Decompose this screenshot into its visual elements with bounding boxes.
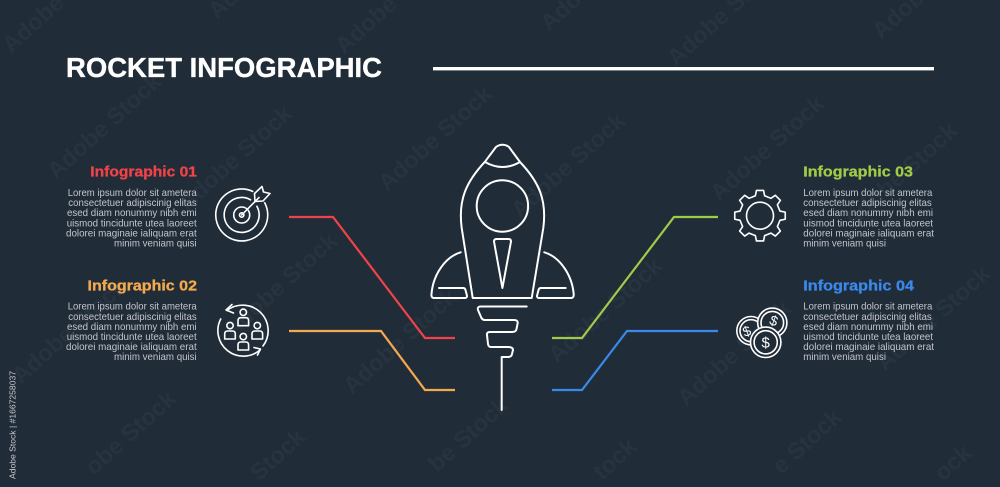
rocket window (477, 180, 528, 232)
connector line: orange (289, 331, 455, 390)
right wing (537, 252, 574, 298)
body text 04: consectetuer adipiscinig elitas (803, 312, 932, 323)
watermarks: Adobe Stock (672, 295, 797, 411)
body text 01: minim veniam quisi (114, 238, 197, 250)
body text 01: esed diam nonummy nibh emi (67, 208, 197, 219)
rocket exhaust trail (478, 306, 527, 410)
body text 04 (803, 302, 934, 363)
watermarks: Adobe Stock (373, 80, 498, 196)
body text 03 (803, 188, 934, 250)
body text 01: uismod tincidunte utea laoreet (67, 218, 197, 229)
connector line: blue (552, 331, 718, 390)
heading 03: Infographic 03 (803, 164, 913, 180)
heading 01: Infographic 01 (90, 164, 197, 180)
rocket nose (485, 162, 520, 167)
body text 04: Lorem ipsum dolor sit ametera (803, 302, 933, 313)
watermarks: Adobe Stock (218, 227, 343, 343)
body text 01: Lorem ipsum dolor sit ametera (68, 188, 197, 199)
body text 03: uismod tincidunte utea laoreet (803, 218, 933, 229)
icon: coins: $ (767, 312, 780, 329)
watermarks: be Stock (423, 391, 514, 477)
watermarks: Adobe Stock (173, 100, 298, 216)
panel: infographic 02 text (66, 278, 197, 363)
body text 01 (66, 188, 197, 250)
left wing (431, 252, 467, 298)
watermarks: e Stock (767, 403, 847, 479)
icon: coins: $ (740, 322, 753, 340)
panel: infographic 01 text (66, 164, 197, 250)
panel: infographic 03 text (803, 164, 934, 250)
watermarks: Adobe Stock (506, 107, 631, 223)
watermarks: Adobe Stock (7, 273, 132, 389)
watermarks: Adobe Stock (42, 68, 167, 184)
watermarks: Adobe Stock (871, 260, 996, 376)
body text 02: Lorem ipsum dolor sit ametera (68, 302, 197, 313)
watermarks: Adobe Stock (705, 90, 830, 206)
body text 02 (66, 302, 197, 363)
body text 03: consectetuer adipiscinig elitas (803, 198, 932, 209)
body text 02: uismod tincidunte utea laoreet (67, 332, 197, 343)
icon: gear (735, 190, 785, 241)
icon: coins: $ (762, 335, 770, 352)
watermarks: ock (929, 439, 977, 486)
stock id: Adobe Stock | #1667258037 (8, 371, 18, 479)
body text 03: Lorem ipsum dolor sit ametera (803, 188, 933, 199)
heading 02: Infographic 02 (88, 278, 197, 294)
watermarks: obe Stock (80, 385, 181, 480)
watermarks: Adobe Stock (543, 252, 668, 368)
body text 04: dolorei maginaie ialiquam erat (803, 342, 934, 353)
panel: infographic 04 text (803, 278, 934, 363)
icon: coins (737, 308, 787, 357)
body text 01: dolorei maginaie ialiquam erat (66, 228, 197, 239)
rocket (431, 145, 574, 410)
title: ROCKET INFOGRAPHIC (66, 52, 382, 83)
body text 01: consectetuer adipiscinig elitas (68, 198, 197, 209)
body text 02: esed diam nonummy nibh emi (67, 322, 197, 333)
body text 03: dolorei maginaie ialiquam erat (803, 228, 934, 239)
icon: team with cycle arrows (218, 304, 268, 356)
rocket centre fin (494, 239, 511, 288)
body text 02: consectetuer adipiscinig elitas (68, 312, 197, 323)
connector line: green (552, 217, 718, 338)
body text 04: esed diam nonummy nibh emi (803, 322, 933, 333)
watermarks: Stock (245, 423, 311, 486)
watermarks: tock (588, 432, 642, 485)
body text 02: dolorei maginaie ialiquam erat (66, 342, 197, 353)
body text 04: minim veniam quisi (803, 352, 886, 363)
heading 04: Infographic 04 (803, 278, 915, 294)
rocket body (461, 145, 544, 298)
body text 03: esed diam nonummy nibh emi (803, 208, 933, 219)
watermarks: Adobe Stock (338, 283, 463, 399)
body text 02: minim veniam quisi (114, 352, 197, 363)
title rule (433, 67, 934, 70)
body text 03: minim veniam quisi (803, 238, 886, 250)
icon: target with arrow (216, 186, 270, 241)
watermarks: Adobe Stock (838, 117, 963, 233)
body text 04: uismod tincidunte utea laoreet (803, 332, 933, 343)
connector line: red (289, 217, 455, 338)
